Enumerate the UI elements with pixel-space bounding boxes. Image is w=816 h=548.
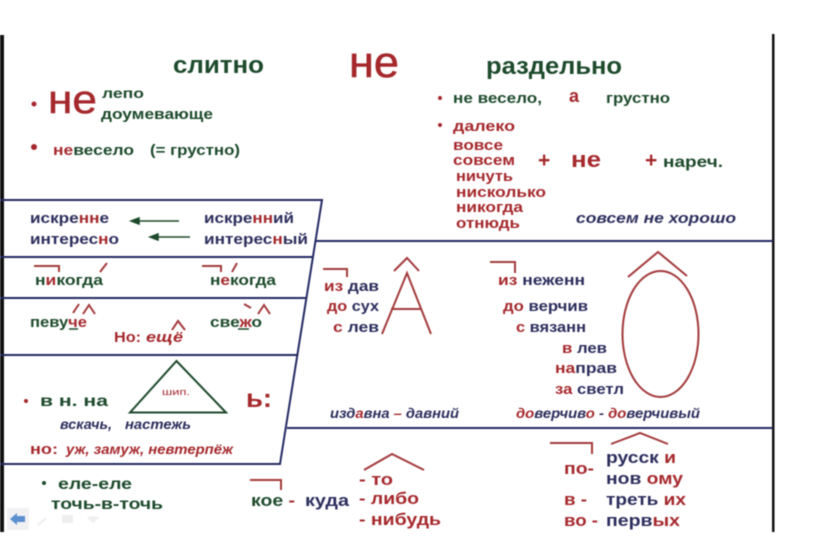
text block: далеко + не + нареч.: далеко xyxy=(453,118,515,135)
row: в н. на шип. ь xyxy=(24,361,272,458)
text block: далеко + не + нареч.: никогда xyxy=(456,199,524,216)
right frame border xyxy=(772,34,774,532)
text block: нелепо, недоумевающе: лепо xyxy=(102,85,144,101)
text block: далеко + не + нареч.: + xyxy=(645,149,657,172)
group: по-русски, по-новому, в-третьих, во-первых: нов ому xyxy=(606,469,684,488)
text block: нелепо, недоумевающе: не xyxy=(48,78,97,122)
row: искренне, интересно: интерес ный xyxy=(204,231,308,248)
text block: далеко + не + нареч.: вовсе xyxy=(453,137,503,154)
text block: нелепо, недоумевающе: доумевающе xyxy=(101,106,213,123)
row: в н. на шип. ь: в н. на xyxy=(40,393,108,410)
icon: letter O xyxy=(622,271,698,397)
group: неженно with O letter: в лев xyxy=(562,340,607,357)
group: издавна with A letter: издавна – давний xyxy=(330,405,459,421)
left frame border xyxy=(0,35,4,532)
arrow: top xyxy=(131,218,179,224)
group: по-русски, по-новому, в-третьих, во-первых: русск и xyxy=(606,448,676,467)
group: неженно with O letter: направ xyxy=(555,360,617,377)
group: издавна with A letter xyxy=(323,258,459,421)
row: в н. на шип. ь: настежь xyxy=(125,416,191,432)
text block: невесело (= грустно): невесело xyxy=(53,142,134,159)
row: никогда, некогда: некогда xyxy=(210,272,277,289)
row: в н. на шип. ь: ь: xyxy=(246,383,272,413)
group: по-русски, по-новому, в-третьих, во-первых: по- xyxy=(564,459,594,478)
group: издавна with A letter: из дав xyxy=(324,278,379,295)
group: по-русски, по-новому, в-третьих, во-первых: в - xyxy=(564,490,587,509)
row: певуче, свежо, ещё: ещё xyxy=(146,329,183,346)
example: совсем не хорошо: совсем не хорошо xyxy=(576,210,736,227)
panel: table lines xyxy=(0,200,773,464)
text block: кое-куда -то -либо -нибудь: куда xyxy=(305,491,350,510)
group: издавна with A letter: с лев xyxy=(333,319,379,336)
icon: triangle шип. xyxy=(130,361,226,412)
text block: еле-еле, точь-в-точь: еле-еле xyxy=(58,476,132,493)
row: в н. на шип. ь: но: xyxy=(30,441,58,458)
arrow: bottom xyxy=(150,234,190,240)
text block: кое-куда -то -либо -нибудь: - нибудь xyxy=(359,510,441,529)
text block: далеко + не + нареч.: ничуть xyxy=(456,168,513,185)
group: по-русски, по-новому, в-третьих, во-первых: во - xyxy=(564,511,598,530)
row: никогда, некогда: никогда xyxy=(35,272,104,289)
text block: нелепо, недоумевающе xyxy=(32,78,213,123)
row: певуче, свежо, ещё xyxy=(30,304,270,346)
group: по-русски, по-новому, в-третьих, во-первых: перв ых xyxy=(606,511,681,530)
text block: далеко + не + нареч.: совсем xyxy=(453,152,515,169)
row: в н. на шип. ь: уж, замуж, невтерпёж xyxy=(65,441,234,457)
text block: кое-куда -то -либо -нибудь: кое - xyxy=(251,491,295,510)
group: неженно with O letter: с вязанн xyxy=(516,319,586,336)
text block: далеко + не + нареч.: + xyxy=(538,149,550,172)
text block: еле-еле, точь-в-точь xyxy=(42,476,163,513)
group: неженно with O letter: доверчиво - доверчивый xyxy=(516,405,700,421)
group: по-русски, по-новому, в-третьих, во-первых: треть их xyxy=(606,490,687,509)
group: неженно with O letter: до верчив xyxy=(503,298,588,315)
text block: невесело (= грустно): (= грустно) xyxy=(150,142,240,159)
row: в н. на шип. ь: вскачь, xyxy=(60,416,112,432)
text block: далеко + не + нареч.: отнюдь xyxy=(456,215,520,232)
row: искренне, интересно: искре нний xyxy=(204,210,294,227)
text block: кое-куда -то -либо -нибудь xyxy=(250,454,441,529)
text block: не весело, а грустно: а xyxy=(569,86,580,106)
row: искренне, интересно: интерес но xyxy=(30,231,119,248)
icon: triangle шип.: шип. xyxy=(162,387,190,397)
row: певуче, свежо, ещё: певуче xyxy=(30,314,87,331)
icon: letter A xyxy=(382,273,431,334)
row: искренне, интересно: искре нне xyxy=(30,210,109,227)
heading: слитно: слитно xyxy=(173,52,264,79)
text block: еле-еле, точь-в-точь: точь-в-точь xyxy=(51,496,163,513)
heading: раздельно: раздельно xyxy=(486,53,622,80)
group: неженно with O letter: из неженн xyxy=(498,272,585,289)
text block: далеко + не + нареч.: нареч. xyxy=(663,154,723,171)
row: певуче, свежо, ещё: Но: xyxy=(114,329,141,346)
group: по-русски, по-новому, в-третьих, во-первых xyxy=(550,433,687,530)
text block: далеко + не + нареч.: не xyxy=(571,147,601,172)
row: искренне, интересно xyxy=(30,210,308,248)
text block: кое-куда -то -либо -нибудь: - либо xyxy=(359,489,419,508)
group: неженно with O letter xyxy=(490,252,700,421)
text block: не весело, а грустно: грустно xyxy=(606,90,670,107)
heading: не: не xyxy=(349,38,399,87)
text block: далеко + не + нареч.: нисколько xyxy=(456,184,546,201)
text block: далеко + не + нареч. xyxy=(438,118,723,232)
row: певуче, свежо, ещё: све жо xyxy=(210,314,262,331)
row: никогда, некогда xyxy=(34,263,277,289)
text block: кое-куда -то -либо -нибудь: - то xyxy=(359,470,393,489)
group: издавна with A letter: до сух xyxy=(327,298,380,315)
icon: player toolbar xyxy=(7,508,99,530)
group: неженно with O letter: за светл xyxy=(555,381,624,398)
text block: не весело, а грустно: не весело, xyxy=(453,90,542,107)
text block: невесело (= грустно) xyxy=(31,142,240,159)
text block: не весело, а грустно xyxy=(438,86,670,107)
